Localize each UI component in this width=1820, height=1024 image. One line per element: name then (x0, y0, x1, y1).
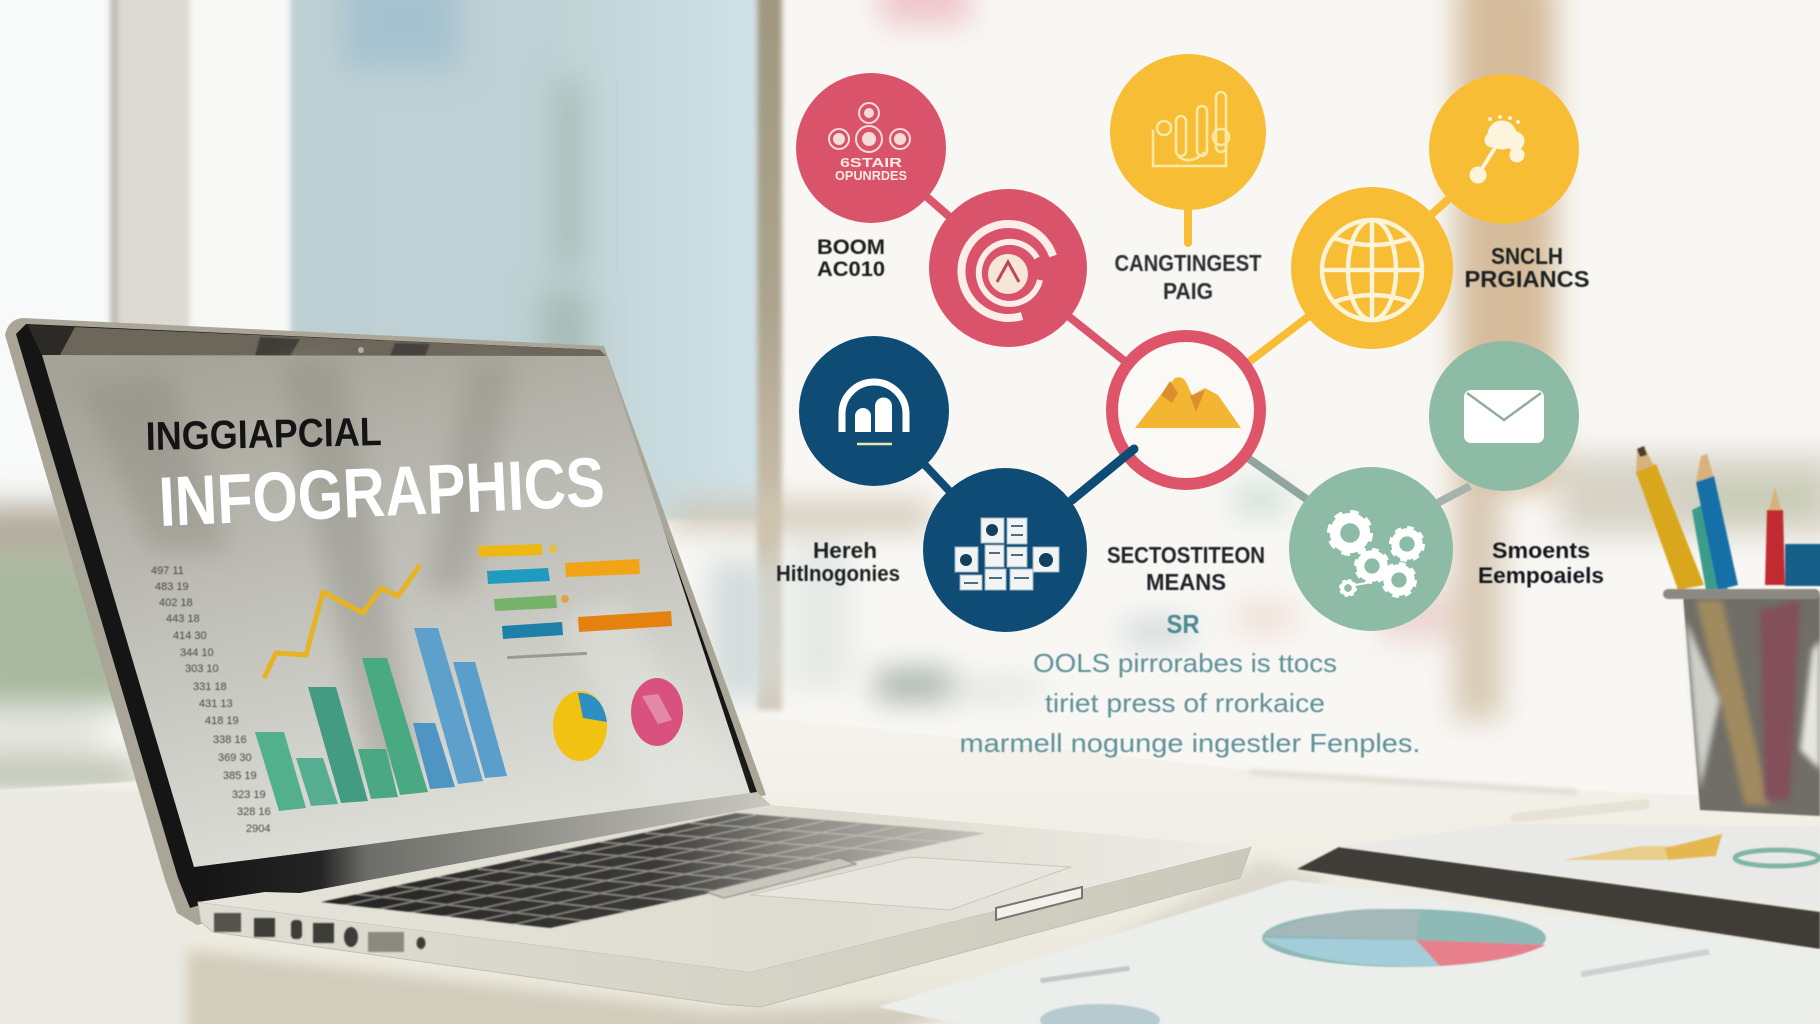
icon: gears (1330, 513, 1422, 596)
table surface (0, 716, 1820, 1024)
axis numbers: 369 30 (218, 752, 252, 764)
description heading: SR (1166, 609, 1200, 639)
folder with documents (1297, 799, 1820, 949)
node: pink spiral (929, 189, 1087, 347)
icon: bar chart outline (1153, 92, 1229, 166)
axis numbers: 431 13 (199, 698, 233, 710)
line chart (264, 565, 420, 678)
latch (996, 887, 1082, 920)
badge text: 6STAIR (840, 155, 903, 170)
node: yellow chart (1110, 54, 1266, 210)
axis numbers: 402 18 (159, 597, 193, 609)
screen title small: INGGIAPCIAL (145, 410, 382, 459)
node: navy dashboard (923, 468, 1087, 632)
label: snclh: PRGIANCS (1464, 266, 1590, 292)
mesh cup (1663, 589, 1820, 816)
trackpad (750, 857, 1071, 910)
laptop screen (42, 347, 751, 867)
laptop (5, 318, 1251, 1007)
connector lines (871, 132, 1504, 550)
document with pie chart (878, 880, 1820, 1024)
axis numbers: 443 18 (166, 613, 200, 625)
laptop side (198, 847, 1251, 1007)
label: hereh: Hitlnogonies (776, 561, 900, 586)
icon: document tiles (955, 518, 1059, 590)
badge text: OPUNRDES (835, 168, 907, 183)
icon: network nodes (1470, 116, 1524, 183)
axis numbers: 483 19 (155, 581, 189, 593)
icon: arch with bars (842, 382, 906, 444)
pen cup with pencils (1636, 446, 1820, 816)
axis numbers: 385 19 (223, 770, 257, 782)
laptop deck (198, 805, 1251, 972)
pencils (1636, 446, 1820, 590)
icon: envelope (1464, 390, 1544, 443)
label: sectostiteon: MEANS (1146, 569, 1226, 595)
node: green mail (1429, 341, 1579, 491)
label: snclh: SNCLH (1491, 243, 1563, 269)
space bar (706, 858, 856, 898)
axis numbers: 418 19 (205, 715, 239, 727)
keyboard (321, 813, 986, 928)
node: navy arch (799, 336, 949, 486)
icon: spiral target (961, 224, 1053, 318)
label: cangtingest: PAIG (1163, 278, 1213, 304)
pink badge (631, 678, 683, 746)
description line 3: marmell nogunge ingestler Fenples. (960, 728, 1420, 758)
horizontal bars legend (478, 544, 672, 659)
description text (960, 609, 1420, 758)
description line 1: OOLS pirrorabes is ttocs (1033, 648, 1337, 678)
laptop lid (5, 318, 766, 925)
pie icon (553, 691, 607, 761)
bar chart (255, 628, 507, 811)
label: cangtingest: CANGTINGEST (1114, 250, 1262, 276)
connector: navy to ring (1072, 449, 1134, 500)
webcam dot (358, 347, 364, 353)
axis numbers: 414 30 (173, 630, 207, 642)
icon: people group (829, 103, 910, 152)
icon: golden peaks (1135, 377, 1241, 428)
node: green gears (1289, 467, 1453, 631)
screen reflections (80, 360, 740, 800)
description line 2: tiriet press of rrorkaice (1045, 688, 1325, 718)
node: pink people (796, 73, 946, 223)
label: smoents: Eempoaiels (1478, 563, 1604, 588)
label: sectostiteon: SECTOSTITEON (1107, 542, 1265, 568)
pie chart (1262, 909, 1546, 967)
axis numbers: 323 19 (232, 789, 266, 801)
label: boom: BOOM (817, 236, 885, 259)
hinge (193, 792, 772, 905)
axis numbers: 331 18 (193, 681, 227, 693)
axis numbers: 2904 (246, 823, 270, 835)
side ports (214, 913, 426, 952)
axis numbers: 303 10 (185, 663, 219, 675)
node: yellow network (1429, 74, 1579, 224)
node: central ring (1112, 336, 1260, 484)
axis numbers (151, 565, 271, 835)
axis numbers: 328 16 (237, 806, 271, 818)
icon: globe (1322, 220, 1422, 320)
axis numbers: 497 11 (151, 565, 184, 577)
screen title large: INFOGRAPHICS (157, 443, 606, 541)
label: hereh: Hereh (813, 538, 877, 563)
axis numbers: 344 10 (180, 647, 214, 659)
label: smoents: Smoents (1492, 538, 1590, 563)
node: yellow globe (1291, 187, 1453, 349)
axis numbers: 338 16 (213, 734, 247, 746)
label: boom: AC010 (817, 258, 885, 281)
